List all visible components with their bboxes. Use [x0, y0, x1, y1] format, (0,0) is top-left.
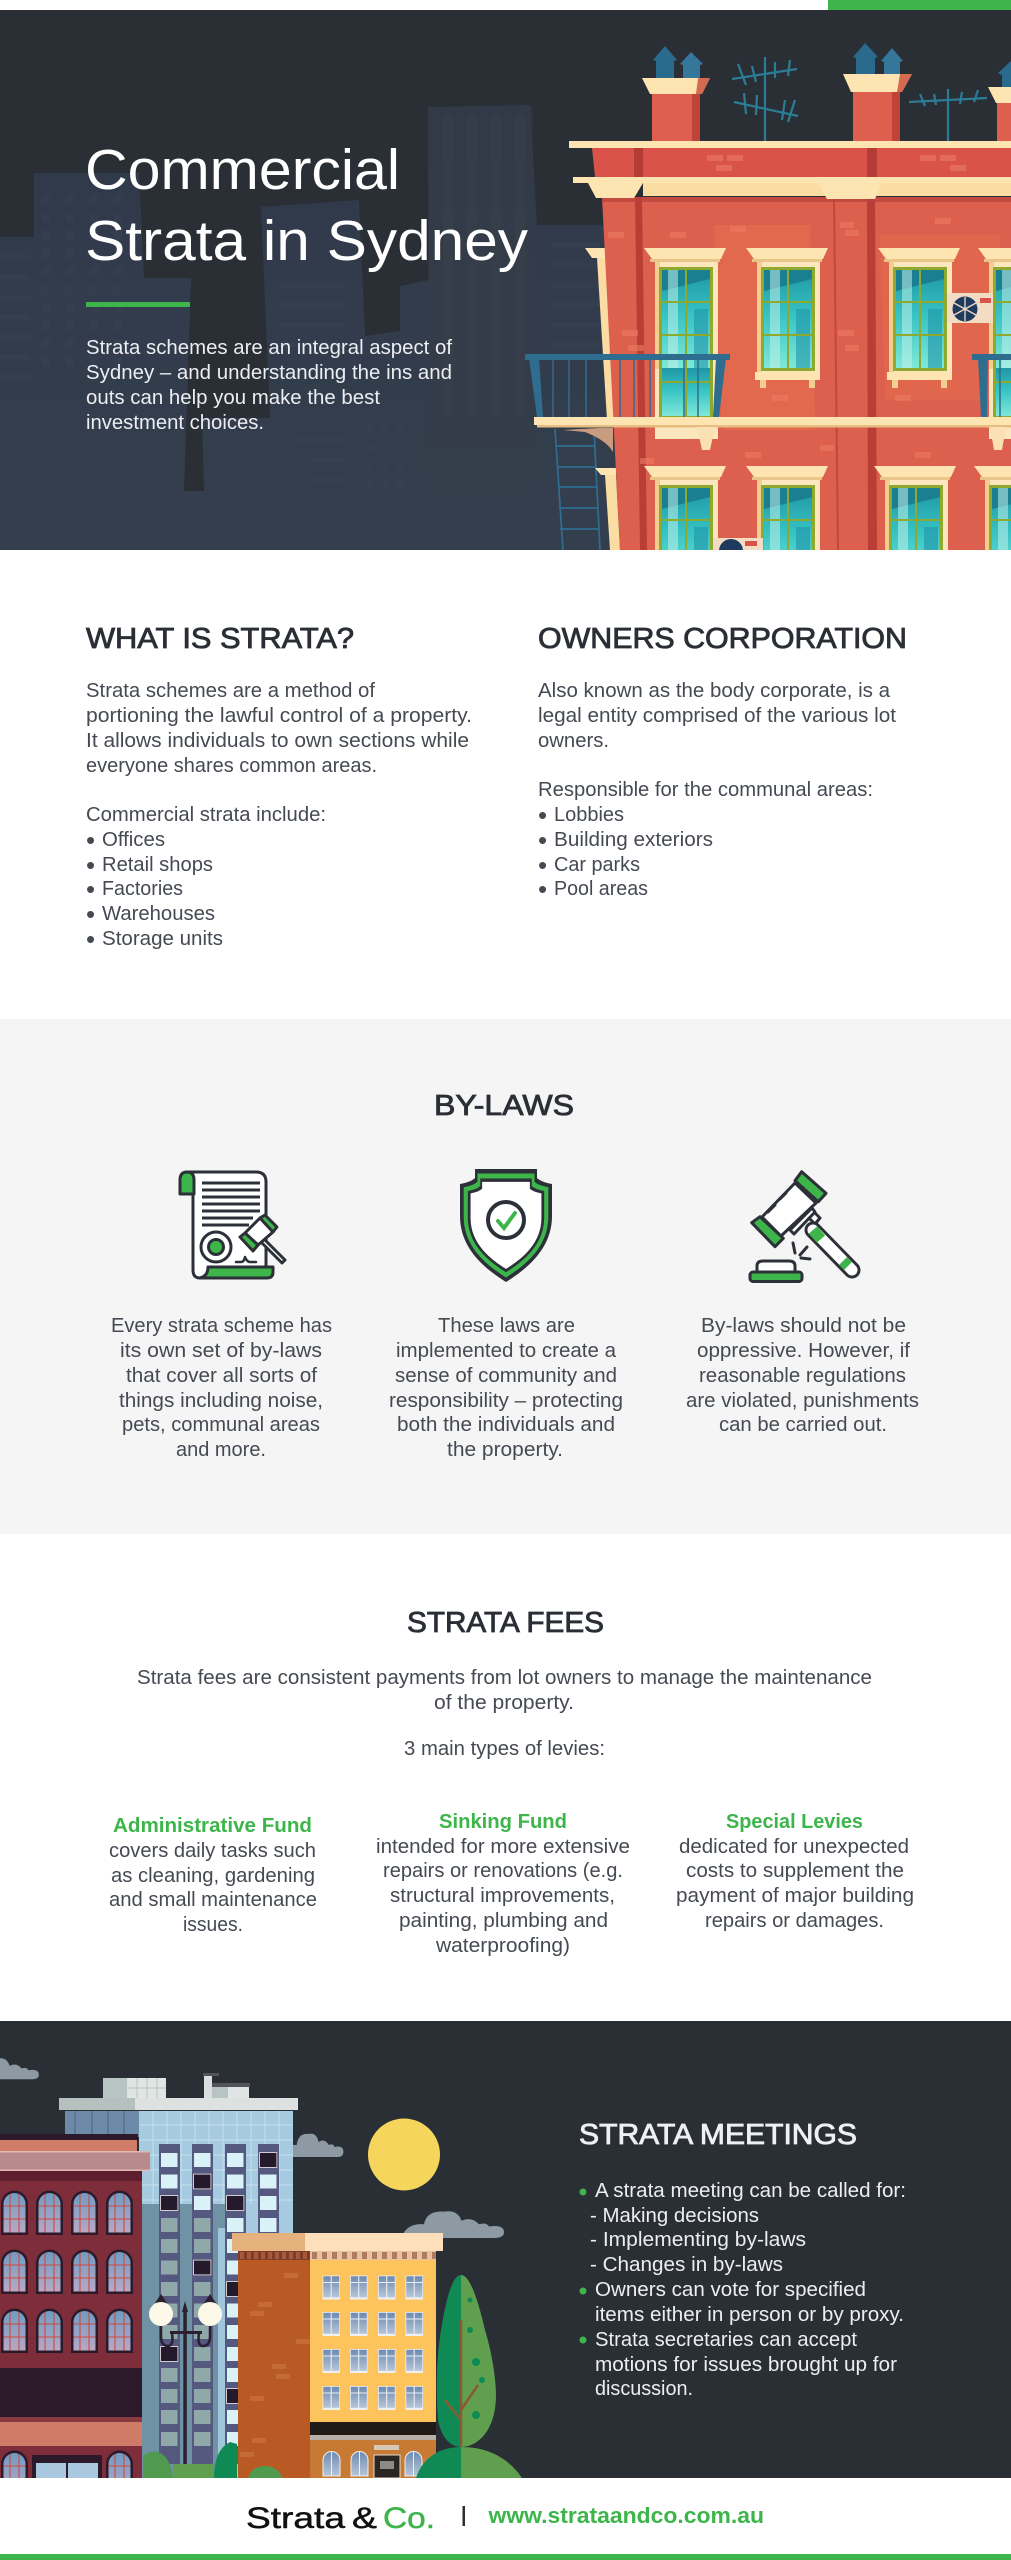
tree	[437, 2275, 496, 2452]
text: by-laws column 3	[686, 1315, 919, 1436]
text: owners corporation body: •	[538, 850, 547, 880]
levy: administrative fund: covers daily tasks such	[109, 1840, 316, 1862]
air conditioner unit	[947, 293, 993, 323]
panel: strata meetings	[0, 2021, 1011, 2495]
heading: owners corporation: OWNERS CORPORATION	[538, 623, 907, 655]
hero skyline background	[0, 105, 640, 550]
ground and shrubs	[143, 2442, 522, 2478]
title	[85, 138, 529, 273]
text: strata fees intro	[137, 1667, 872, 1760]
hero intro text	[86, 337, 452, 434]
levy: sinking fund: Sinking Fund	[439, 1811, 567, 1833]
levy: administrative fund	[109, 1815, 317, 1936]
text: owners corporation body: Building exteriors	[554, 829, 713, 851]
text: what is strata body: •	[86, 874, 95, 904]
windows row 1	[644, 248, 1011, 439]
list: strata meetings bullets: - Changes in by-laws	[590, 2254, 783, 2276]
text: owners corporation body	[538, 680, 896, 904]
text: owners corporation body: owners.	[538, 730, 609, 752]
text: by-laws column 3: are violated, punishments	[686, 1390, 919, 1412]
footer	[0, 2502, 1011, 2560]
text: what is strata body: •	[86, 825, 95, 855]
levy: sinking fund: structural improvements,	[390, 1885, 615, 1907]
hero intro text: investment choices.	[86, 412, 264, 434]
text: owners corporation body: Also known as the body corporate, is a	[538, 680, 891, 702]
levy: special levies: payment of major building	[676, 1885, 914, 1907]
logo: Strata and Co.: Strata	[246, 2502, 345, 2535]
heading: strata fees: STRATA FEES	[407, 1607, 604, 1639]
antennas	[732, 57, 987, 141]
text: strata fees intro: of the property.	[434, 1692, 574, 1714]
levy: administrative fund: and small maintenance	[109, 1889, 317, 1911]
levy: sinking fund: waterproofing)	[435, 1935, 570, 1957]
footer separator	[462, 2506, 465, 2526]
text: by-laws column 2: implemented to create a	[396, 1340, 617, 1362]
bottom accent bar	[0, 2554, 1011, 2560]
title: Commercial	[85, 138, 400, 202]
heading: strata meetings: STRATA MEETINGS	[579, 2119, 857, 2151]
text: what is strata body: Warehouses	[102, 903, 215, 925]
text: owners corporation body: Car parks	[554, 854, 640, 876]
text: owners corporation body: Pool areas	[554, 878, 648, 900]
text: by-laws column 3: can be carried out.	[719, 1414, 887, 1436]
balconies	[525, 354, 1011, 452]
levy: sinking fund: intended for more extensive	[376, 1836, 630, 1858]
text: what is strata body: Offices	[102, 829, 165, 851]
text: by-laws column 1	[111, 1315, 332, 1461]
side windows at building corner	[585, 248, 620, 550]
tower window panes	[160, 2152, 277, 2446]
top accent bar	[828, 0, 1011, 10]
logo: Strata and Co.: &	[352, 2502, 377, 2535]
hero intro text: Strata schemes are an integral aspect of	[86, 337, 452, 359]
text: by-laws column 1: pets, communal areas	[122, 1414, 320, 1436]
list: strata meetings bullets: items either in person or by proxy.	[595, 2304, 904, 2326]
text: by-laws column 2: sense of community and	[395, 1365, 617, 1387]
text: by-laws column 1: its own set of by-laws	[120, 1340, 322, 1362]
icon: shield with check	[460, 1169, 552, 1282]
panel: by-laws	[0, 1019, 1011, 1534]
text: strata fees intro: Strata fees are consistent payments from lot owners to manage the maintenance	[137, 1667, 872, 1689]
text: by-laws column 2: responsibility – protecting	[389, 1390, 623, 1412]
levy: special levies: costs to supplement the	[686, 1860, 904, 1882]
text: what is strata body: Storage units	[102, 928, 223, 950]
heading: by-laws: BY-LAWS	[434, 1090, 574, 1122]
text: what is strata body: Commercial strata include:	[86, 804, 326, 826]
text: by-laws column 3: reasonable regulations	[699, 1365, 906, 1387]
list: strata meetings bullets: motions for issues brought up for	[595, 2354, 897, 2376]
street lamp	[149, 2294, 222, 2478]
text: what is strata body: •	[86, 850, 95, 880]
text: owners corporation body: •	[538, 874, 547, 904]
list: strata meetings bullets: A strata meeting can be called for:	[595, 2180, 906, 2202]
text: by-laws column 1: things including noise,	[119, 1390, 323, 1412]
text: by-laws column 2: both the individuals and	[397, 1414, 615, 1436]
orange apartment building	[232, 2233, 443, 2478]
heading: what is strata: WHAT IS STRATA?	[86, 623, 354, 655]
text: owners corporation body: •	[538, 800, 547, 830]
list: strata meetings bullets: Strata secretaries can accept	[595, 2329, 857, 2351]
text: owners corporation body: •	[538, 825, 547, 855]
text: by-laws column 1: Every strata scheme has	[111, 1315, 332, 1337]
text: what is strata body	[86, 680, 472, 954]
website url: www.strataandco.com.au	[487, 2503, 764, 2528]
list: strata meetings bullets: - Implementing by-laws	[590, 2229, 806, 2251]
tall glass tower	[59, 2073, 298, 2478]
text: by-laws column 2: the property.	[447, 1439, 563, 1461]
windows row 2	[644, 466, 1011, 550]
chimneys	[642, 43, 1011, 141]
list: strata meetings bullets: - Making decisions	[590, 2205, 759, 2227]
clouds	[0, 2058, 504, 2238]
text: what is strata body: It allows individuals to own sections while	[86, 730, 469, 752]
logo: Strata and Co.	[246, 2502, 435, 2535]
levy: special levies: Special Levies	[726, 1811, 863, 1833]
sun	[368, 2118, 440, 2190]
text: owners corporation body: legal entity comprised of the various lot	[538, 705, 896, 727]
text: by-laws column 3: By-laws should not be	[701, 1315, 906, 1337]
text: by-laws column 3: oppressive. However, if	[697, 1340, 910, 1362]
text: what is strata body: Retail shops	[102, 854, 213, 876]
list: strata meetings bullets	[580, 2180, 906, 2400]
text: what is strata body: Strata schemes are a method of	[86, 680, 375, 702]
levy: special levies: repairs or damages.	[705, 1910, 884, 1932]
levy: administrative fund: as cleaning, gardening	[111, 1865, 315, 1887]
text: what is strata body: everyone shares common areas.	[86, 755, 377, 777]
text: what is strata body: Factories	[102, 878, 183, 900]
text: what is strata body: •	[86, 924, 95, 954]
red heritage building	[0, 2134, 150, 2495]
panel: owners corporation	[538, 623, 907, 904]
list: strata meetings bullets: Owners can vote for specified	[595, 2279, 866, 2301]
title: Strata in Sydney	[85, 209, 529, 273]
levy: sinking fund: repairs or renovations (e.g.	[383, 1860, 623, 1882]
text: by-laws column 2	[389, 1315, 623, 1461]
list: strata meetings bullets: discussion.	[595, 2378, 693, 2400]
text: strata fees intro: 3 main types of levies:	[404, 1738, 605, 1760]
illustration: red brick building	[525, 43, 1011, 550]
logo: Strata and Co.: Co.	[383, 2502, 435, 2535]
text: by-laws column 1: and more.	[176, 1439, 266, 1461]
panel: what is strata	[86, 623, 472, 954]
levy: special levies	[676, 1811, 914, 1932]
cornice mouldings	[573, 177, 1011, 183]
levy: special levies: dedicated for unexpected	[679, 1836, 909, 1858]
text: by-laws column 2: These laws are	[438, 1315, 575, 1337]
hero intro text: outs can help you make the best	[86, 387, 380, 409]
text: owners corporation body: Lobbies	[554, 804, 624, 826]
text: what is strata body: portioning the lawful control of a property.	[86, 705, 472, 727]
title underline	[86, 302, 190, 307]
icon: scroll with gavel	[180, 1172, 285, 1278]
text: owners corporation body: Responsible for the communal areas:	[538, 779, 873, 801]
levy: administrative fund: Administrative Fund	[113, 1815, 312, 1837]
levy: sinking fund: painting, plumbing and	[399, 1910, 608, 1932]
text: by-laws column 1: that cover all sorts of	[126, 1365, 317, 1387]
icon: gavel	[750, 1172, 852, 1282]
text: what is strata body: •	[86, 899, 95, 929]
ladder	[555, 429, 600, 550]
levy: sinking fund	[376, 1811, 630, 1957]
walls	[569, 141, 1011, 148]
panel: strata fees	[109, 1607, 914, 1957]
panel: hero	[0, 10, 1011, 550]
illustration: city street	[0, 2058, 522, 2495]
hero intro text: Sydney – and understanding the ins and	[86, 362, 452, 384]
levy: administrative fund: issues.	[183, 1914, 243, 1936]
